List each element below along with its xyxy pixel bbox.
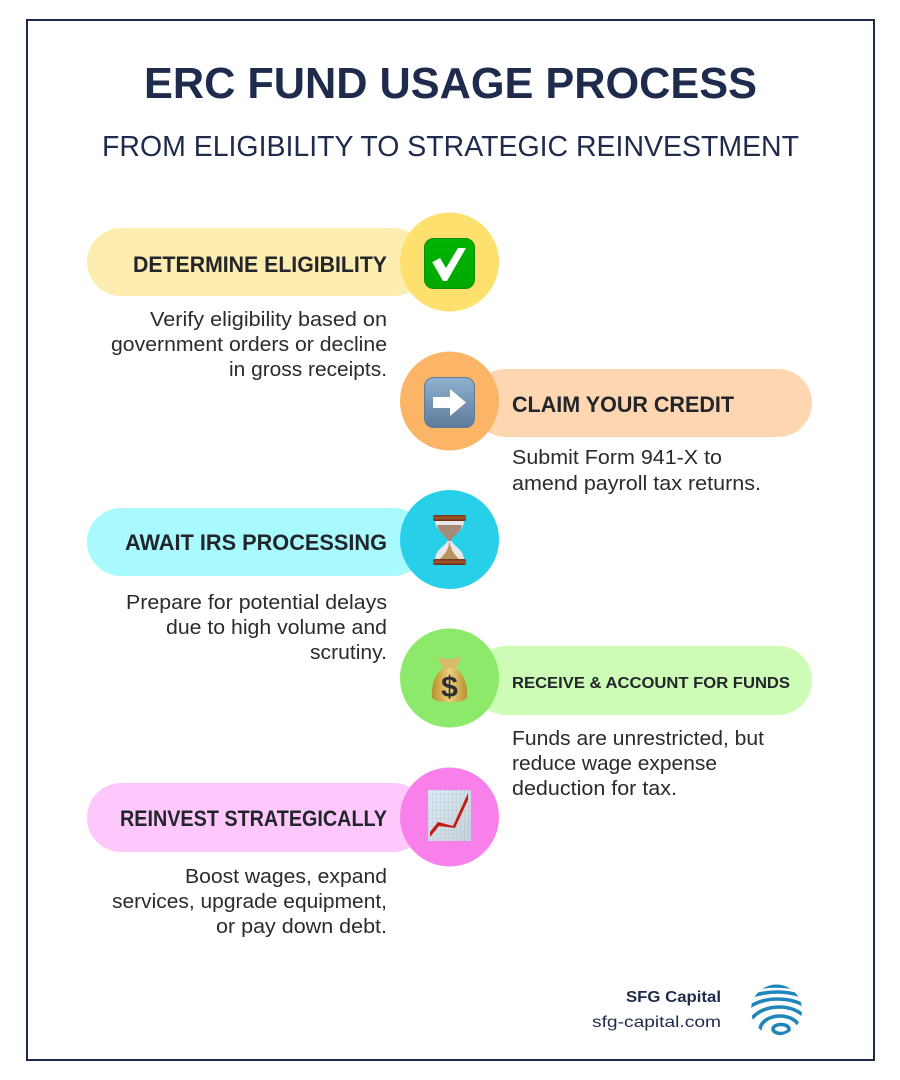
step 5: reinvest strategically <box>87 768 499 938</box>
step 3 description: Prepare for potential delays <box>126 592 387 614</box>
step 3 circle <box>400 490 499 589</box>
step 3 description: due to high volume and <box>166 617 387 639</box>
step 4 circle <box>400 628 499 728</box>
brand name: SFG Capital <box>626 989 721 1006</box>
icon: money bag <box>432 656 467 704</box>
icon: right arrow <box>424 378 474 428</box>
icon: rising chart <box>428 790 471 841</box>
step 3: await IRS processing <box>87 490 499 664</box>
step 3 description: scrutiny. <box>310 642 387 664</box>
icon: striped globe logo <box>751 984 802 1036</box>
step 5 description: Boost wages, expand <box>185 866 387 888</box>
step 4 description <box>512 728 764 800</box>
step 4 heading: RECEIVE & ACCOUNT FOR FUNDS <box>512 675 790 692</box>
website: sfg-capital.com <box>592 1014 721 1031</box>
step 2 description: amend payroll tax returns. <box>512 473 761 495</box>
step 4: receive and account for funds <box>400 628 812 800</box>
step 5 heading: REINVEST STRATEGICALLY <box>120 806 387 831</box>
step 3 heading: AWAIT IRS PROCESSING <box>125 530 387 555</box>
step 1 description: government orders or decline <box>111 334 387 356</box>
step 1 pill <box>87 228 427 296</box>
step 2 circle <box>400 352 499 450</box>
step 3 pill <box>87 508 427 576</box>
step 5 circle <box>400 768 499 866</box>
title: ERC FUND USAGE PROCESS <box>144 59 757 108</box>
subtitle: FROM ELIGIBILITY TO STRATEGIC REINVESTMENT <box>102 131 799 163</box>
icon: green check mark <box>424 238 474 288</box>
step 3 description <box>126 592 387 664</box>
icon: hourglass <box>433 515 466 565</box>
step 5 description <box>112 866 387 938</box>
step 1 heading: DETERMINE ELIGIBILITY <box>133 252 387 277</box>
step 2: claim your credit <box>400 352 812 495</box>
step 4 description: Funds are unrestricted, but <box>512 728 764 750</box>
step 5 description: or pay down debt. <box>216 916 387 938</box>
step 2 pill <box>472 369 812 437</box>
step 5 pill <box>87 783 427 852</box>
step 4 description: deduction for tax. <box>512 778 677 800</box>
step 1 description <box>111 309 387 381</box>
step 2 heading: CLAIM YOUR CREDIT <box>512 392 735 417</box>
step 2 description <box>512 447 761 495</box>
step 1: determine eligibility <box>87 212 499 381</box>
step 1 circle <box>400 212 499 312</box>
step 1 description: Verify eligibility based on <box>150 309 387 331</box>
step 5 description: services, upgrade equipment, <box>112 891 387 913</box>
step 4 pill <box>472 646 812 715</box>
step 2 description: Submit Form 941-X to <box>512 447 722 469</box>
icon: money bag: $ <box>441 671 458 704</box>
step 1 description: in gross receipts. <box>229 359 387 381</box>
step 4 description: reduce wage expense <box>512 753 717 775</box>
